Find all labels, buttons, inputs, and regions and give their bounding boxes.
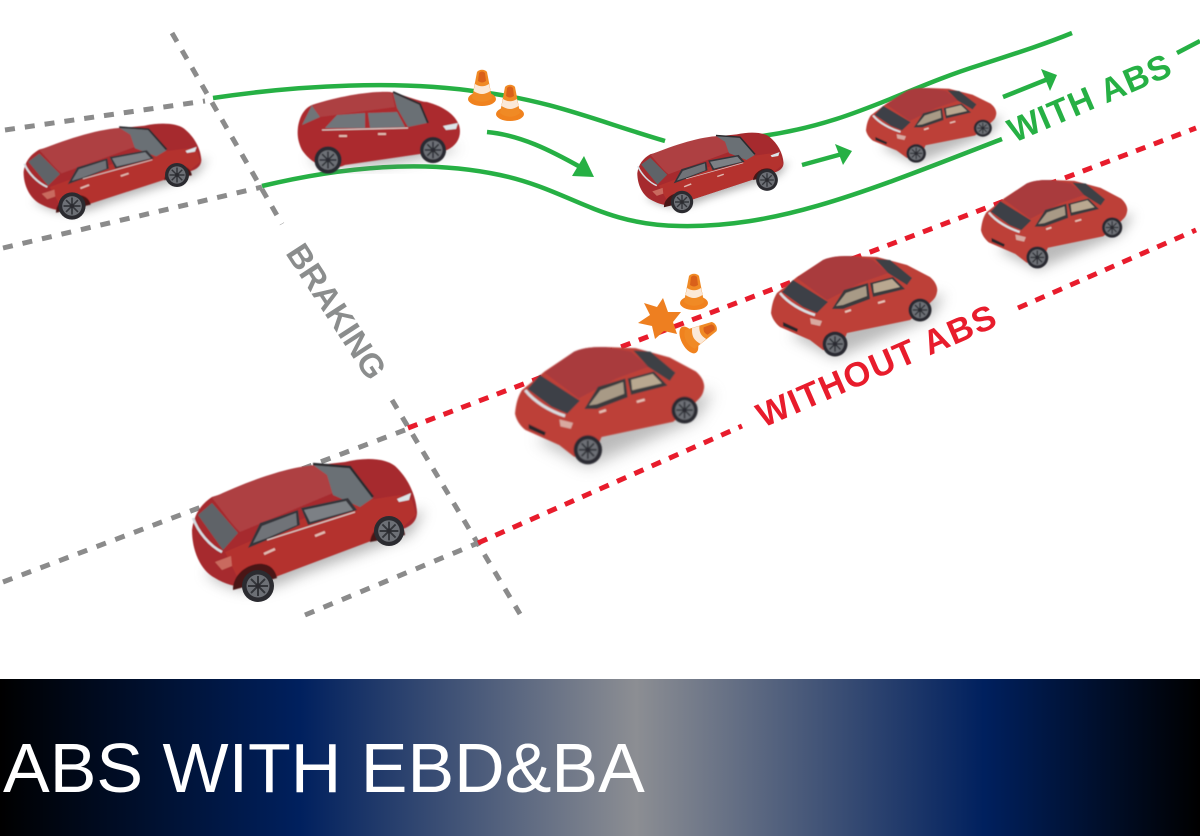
car: mid without ABS xyxy=(771,256,945,358)
cone: crash standing xyxy=(680,274,708,310)
lane line: top upper xyxy=(5,101,205,130)
icon: collision star xyxy=(638,298,681,339)
cone: upper left xyxy=(468,70,496,106)
car: start bottom lane xyxy=(192,459,425,602)
braking line: upper segment xyxy=(172,33,282,224)
car: far ABS path xyxy=(866,88,1002,164)
lane line: top lower xyxy=(3,187,262,248)
car: far without ABS xyxy=(981,180,1134,270)
car: crashing without ABS xyxy=(515,347,713,466)
cone: crash tipped over xyxy=(675,313,723,356)
green path: end stub xyxy=(1177,41,1200,53)
green path: lower edge with ABS xyxy=(262,139,1002,226)
car: side-on entering ABS path xyxy=(298,92,460,174)
arrow: green arrow three xyxy=(1003,69,1057,97)
arrow: green arrow one xyxy=(487,132,594,177)
label: WITH ABS: WITH ABS xyxy=(1002,47,1178,150)
green path: upper edge with ABS xyxy=(213,33,1072,141)
title: ABS WITH EBD&BA xyxy=(3,729,645,807)
label: BRAKING: BRAKING xyxy=(279,237,394,386)
red dashed path: lower edge after label xyxy=(1018,230,1196,308)
arrow: green arrow two xyxy=(802,144,852,165)
label: WITHOUT ABS: WITHOUT ABS xyxy=(751,297,1003,435)
lane line: bottom lower xyxy=(305,543,478,615)
red dashed path: upper edge without ABS xyxy=(408,128,1196,428)
title banner xyxy=(0,679,1200,836)
braking line: lower segment xyxy=(392,400,520,614)
car: start top lane xyxy=(24,124,208,220)
red dashed path: lower edge before label xyxy=(478,426,742,543)
cone: upper right xyxy=(496,85,524,121)
car: mid ABS path xyxy=(637,133,789,213)
lane line: bottom upper xyxy=(3,430,405,582)
